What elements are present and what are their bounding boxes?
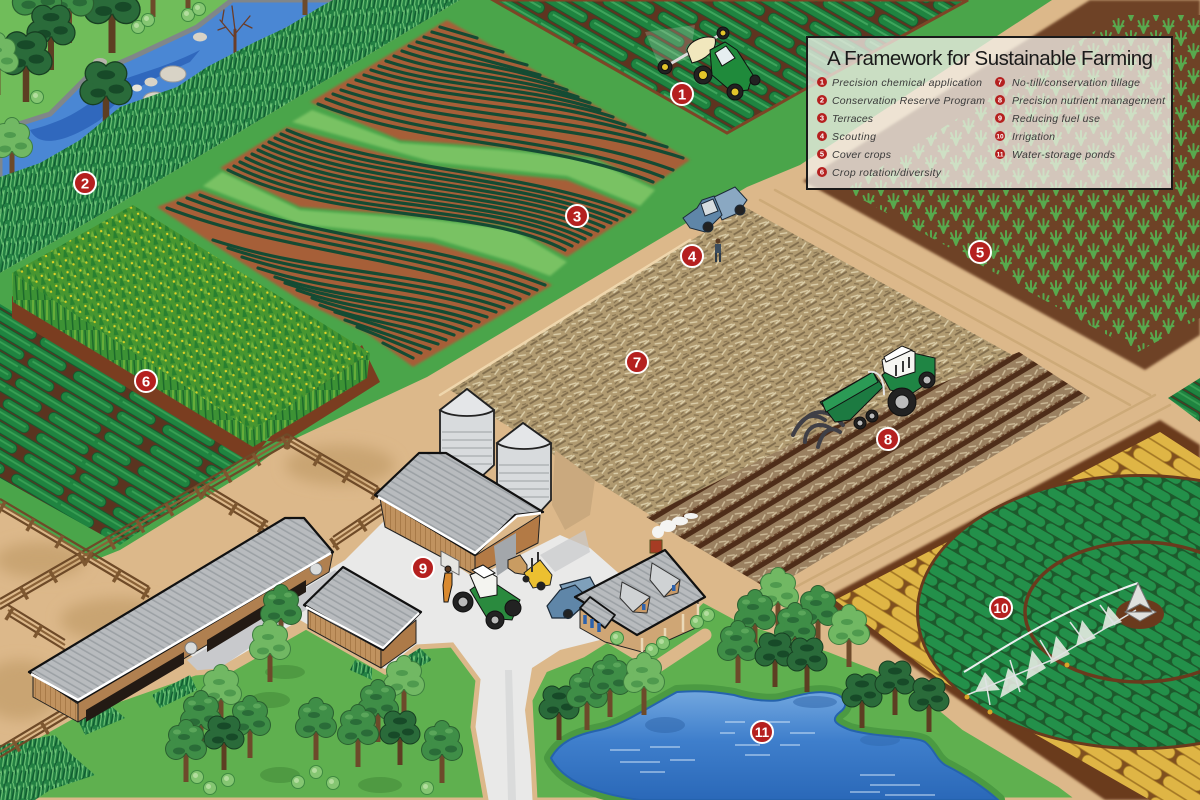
field 6: crop rotation corn block	[12, 205, 380, 462]
porch posts	[642, 604, 698, 652]
field: Conservation Reserve Program grass buffer	[0, 0, 460, 273]
dormer left	[620, 582, 650, 613]
marker numerals: 9	[419, 560, 427, 578]
marker numerals: 5	[976, 244, 984, 262]
legend number bullets: 1	[820, 78, 824, 87]
river	[0, 0, 340, 190]
vehicle: pickup at the yard	[547, 577, 597, 618]
chimney	[650, 540, 662, 553]
legend number bullets: 10	[996, 134, 1004, 141]
legend items right column: No-till/conservation tillage	[1012, 77, 1140, 89]
pond: water-storage	[551, 691, 998, 800]
silos	[440, 389, 551, 512]
vehicle: tractor with manure tanker and injector	[793, 346, 935, 447]
grass terrace strips	[203, 110, 655, 276]
legend number bullets	[817, 77, 1005, 177]
legend items left column: Crop rotation/diversity	[832, 167, 942, 179]
grass base around the fields	[0, 0, 1052, 560]
numbered map markers	[74, 83, 1012, 743]
marker numerals: 2	[81, 176, 89, 192]
marker numerals	[81, 86, 1009, 740]
front gable roof	[580, 597, 615, 628]
road shading	[0, 445, 395, 720]
vehicle: green tractor refuelling and farmer	[443, 565, 521, 629]
legend number bullets: 6	[820, 168, 824, 177]
grass tufts	[0, 648, 432, 800]
irrigation circle crop rows	[919, 477, 1200, 747]
field 5: cover crops	[803, 0, 1200, 370]
marker numerals: 1	[678, 86, 686, 104]
vehicle: scouting pickup	[683, 187, 747, 232]
field 8: precision nutrient management rows	[646, 352, 1090, 590]
building: machinery shop	[375, 453, 543, 576]
legend number bullets: 9	[998, 114, 1002, 123]
fences around paddocks	[0, 434, 382, 757]
field 6: crop rotation green rows	[0, 304, 250, 545]
building: long livestock barn	[29, 518, 333, 722]
marker numerals: 11	[755, 725, 770, 740]
marker numerals: 8	[884, 432, 892, 448]
marker numerals: 3	[573, 208, 581, 226]
legend number bullets: 7	[998, 78, 1002, 87]
main roof	[575, 550, 705, 635]
legend items right column: Irrigation	[1012, 131, 1055, 143]
legend items left column: Terraces	[832, 113, 874, 125]
legend items left column: Precision chemical application	[832, 77, 982, 89]
figure: field scout	[715, 238, 721, 262]
building: farmhouse	[575, 513, 705, 652]
field 3: terrace three	[157, 190, 552, 367]
dormer right	[650, 563, 680, 597]
marker numerals: 4	[688, 248, 697, 266]
legend number bullets: 11	[997, 152, 1004, 159]
smoke	[652, 513, 698, 538]
field 10: irrigated field with gold corner crops	[822, 420, 1200, 800]
bushes around the farmhouse	[610, 608, 714, 656]
trees: riverside woods	[0, 0, 326, 180]
legend items left column: Cover crops	[832, 149, 892, 161]
legend items left column: Conservation Reserve Program	[832, 95, 985, 107]
white gravel yard and driveway	[190, 520, 640, 800]
lawn: pond-side grass	[530, 600, 1080, 800]
field 1: precision chemical application crop rows	[493, 0, 968, 133]
legend number bullets: 8	[998, 96, 1002, 105]
legend number bullets: 5	[820, 150, 824, 159]
building: small shed	[304, 567, 421, 668]
field 7: no-till / conservation tillage	[450, 207, 1090, 590]
house walls	[580, 600, 698, 652]
small field at right edge	[1168, 378, 1200, 422]
icon: center-pivot irrigation rig	[964, 583, 1156, 714]
legend panel	[807, 37, 1172, 189]
trees: pond-side grove	[538, 567, 950, 740]
marker numerals: 10	[993, 601, 1009, 616]
field 3: terrace one	[310, 20, 690, 185]
legend items right column: Water-storage ponds	[1012, 149, 1116, 161]
marker numerals: 7	[633, 354, 641, 372]
top-left wooded land	[0, 0, 335, 180]
icon: bare tree by the river	[218, 6, 252, 54]
vehicle: forklift with crates	[508, 552, 552, 590]
windows	[585, 615, 599, 632]
marker numerals: 6	[142, 374, 150, 390]
legend number bullets: 2	[820, 96, 824, 105]
field 3: terrace two	[220, 127, 638, 257]
legend items right column: Reducing fuel use	[1012, 113, 1100, 125]
lawn: front-left grass	[0, 627, 486, 800]
legend number bullets: 3	[820, 114, 824, 123]
legend title: A Framework for Sustainable Farming	[827, 47, 1153, 70]
legend number bullets: 4	[820, 132, 825, 141]
legend items right column	[1012, 77, 1166, 161]
legend items right column: Precision nutrient management	[1012, 95, 1166, 107]
vehicle: tractor with sprayer	[645, 25, 760, 100]
road ruts	[440, 190, 1170, 595]
shaded concrete under long barn and driveway centre	[187, 450, 595, 800]
trees: front lawn grove	[165, 584, 463, 794]
legend items left column: Scouting	[832, 131, 876, 143]
legend items left column	[832, 77, 985, 179]
